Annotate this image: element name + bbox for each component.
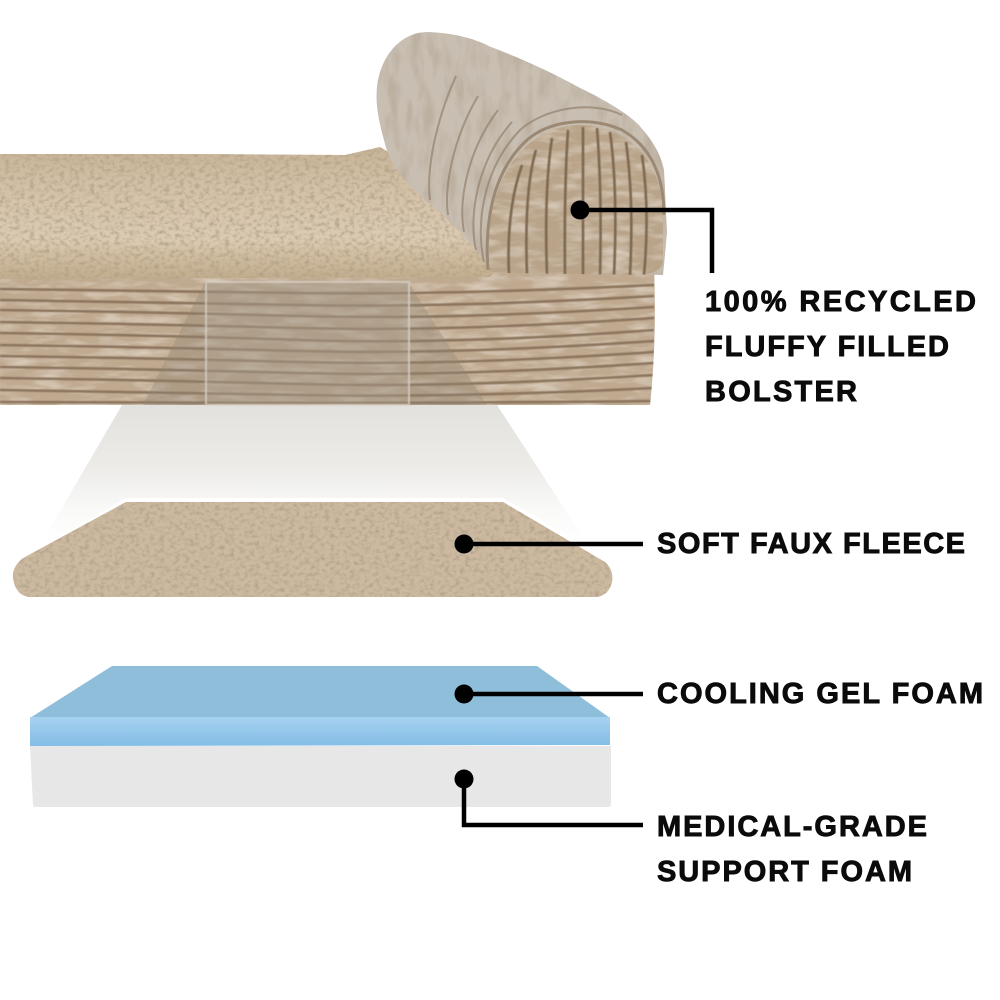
gel foam side <box>30 717 610 746</box>
leader: support foam <box>454 770 643 825</box>
bolster ribs near cap <box>429 76 622 262</box>
label: support foam: SUPPORT FOAM <box>657 856 912 888</box>
label: gel foam: COOLING GEL FOAM <box>657 678 983 710</box>
leader: gel foam <box>454 684 643 704</box>
panel: zoom funnel <box>42 405 586 542</box>
gel foam top surface <box>30 666 610 718</box>
panel: foam stack <box>30 666 611 807</box>
translucent cutaway window <box>206 282 409 405</box>
leader: fleece <box>454 534 643 554</box>
fleece sleeping surface <box>0 147 510 282</box>
translucent cutaway trapezoid <box>143 282 487 405</box>
panel: soft fleece layer <box>13 498 620 597</box>
label: support foam: MEDICAL-GRADE <box>657 811 927 843</box>
corduroy base side <box>0 264 660 406</box>
label: bolster <box>705 286 976 408</box>
label: support foam <box>657 811 927 888</box>
bolster end cap <box>485 120 667 278</box>
fleece highlight edge <box>13 498 620 565</box>
support foam <box>30 746 611 807</box>
label: bolster: FLUFFY FILLED <box>705 331 949 363</box>
label: bolster: BOLSTER <box>705 376 857 408</box>
fleece slab <box>13 502 612 597</box>
leader: bolster <box>570 200 712 273</box>
bolster cap piping <box>487 122 664 270</box>
label: bolster: 100% RECYCLED <box>705 286 976 318</box>
panel: assembled bed <box>0 32 667 406</box>
label: fleece: SOFT FAUX FLEECE <box>657 528 965 560</box>
bolster body <box>377 32 667 275</box>
